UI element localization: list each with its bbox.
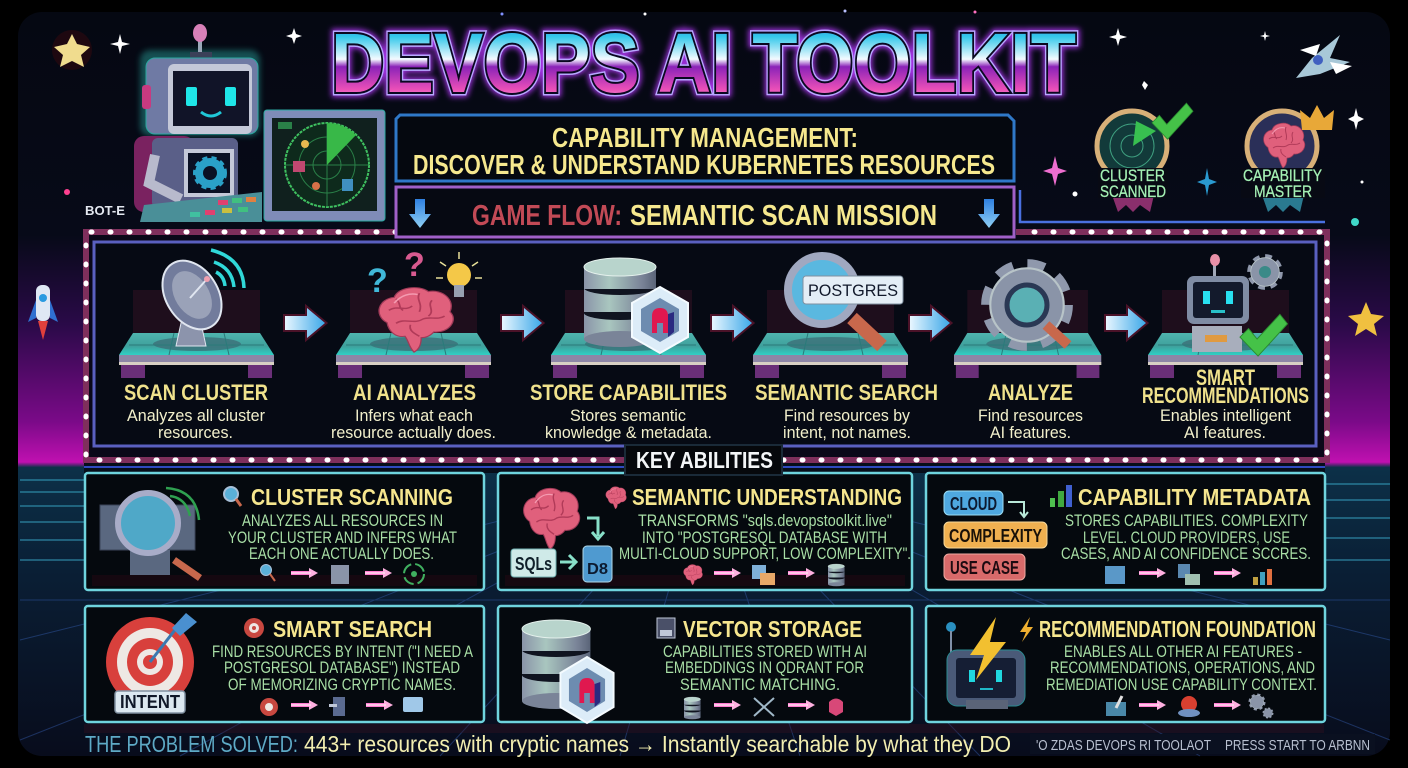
title: DEVOPS AI TOOLKIT [331, 16, 1076, 110]
arrow [910, 308, 950, 338]
icon: control console [140, 192, 262, 222]
card: cluster scanning: ANALYZES ALL RESOURCES IN [242, 511, 443, 530]
icon: gold star [1348, 302, 1384, 336]
badge: cluster scanned: CLUSTER [1100, 166, 1165, 185]
card: smart search [85, 606, 484, 722]
mini flow [1106, 695, 1273, 718]
icon: brain to database: D8 [587, 561, 608, 578]
panel: subtitle [396, 115, 1014, 181]
step 2: AI analyzes: ? [404, 246, 425, 284]
footer credits: PRESS START TO ARBNN [1225, 737, 1370, 754]
icon: down arrow left [409, 199, 431, 228]
icon: robot with lightning [946, 617, 1025, 709]
footer banner: 443+ resources with cryptic names → Instantly searchable by what they DO [304, 731, 1011, 757]
card: semantic understanding: MULTI-CLOUD SUPPORT, LOW COMPLEXITY". [619, 544, 911, 563]
card: recommendation foundation: REMEDIATION USE CAPABILITY CONTEXT. [1046, 675, 1317, 694]
step 6: smart recommendations [1142, 254, 1309, 442]
title: CLUSTER SCANNING [251, 484, 453, 510]
badge: capability master [1241, 105, 1334, 212]
badge: cluster scanned [1097, 103, 1193, 212]
panel: game flow heading: SEMANTIC SCAN MISSION [630, 200, 937, 232]
mini flow [260, 697, 423, 716]
step 1: scan cluster: Analyzes all cluster [127, 406, 265, 425]
title: CAPABILITY METADATA [1078, 484, 1311, 510]
card: semantic understanding [498, 473, 912, 590]
pills: CLOUD [950, 494, 997, 514]
step 3: store capabilities: Stores semantic [570, 406, 686, 425]
POSTGRES tag [803, 276, 903, 304]
panel: subtitle: DISCOVER & UNDERSTAND KUBERNETES RESOURCES [413, 149, 995, 180]
title: SEMANTIC UNDERSTANDING [632, 484, 902, 510]
step 3: store capabilities [530, 258, 727, 442]
icon: rocket [28, 285, 58, 340]
title: DEVOPS AI TOOLKIT [331, 16, 1076, 110]
mini flow [684, 697, 843, 719]
panel: subtitle: CAPABILITY MANAGEMENT: [552, 122, 858, 153]
title: DEVOPS AI TOOLKIT [331, 16, 1076, 110]
pills: COMPLEXITY [949, 526, 1042, 546]
badge: capability master: CAPABILITY [1243, 166, 1322, 185]
card: semantic understanding: INTO "POSTGRESQL DATABASE WITH [642, 528, 887, 547]
icon: brain to database [511, 488, 612, 582]
card: capability metadata [926, 473, 1325, 590]
card: recommendation foundation [926, 606, 1325, 722]
step 1: scan cluster [119, 250, 274, 442]
footer banner: THE PROBLEM SOLVED: [85, 731, 298, 757]
icon: down arrow right [978, 199, 1000, 228]
icon: magnifier over servers [100, 488, 200, 578]
footer credits [1030, 734, 1375, 754]
step 5: analyze [954, 267, 1101, 442]
step 5: analyze: AI features. [990, 423, 1071, 442]
panel: game flow heading: GAME FLOW: [472, 200, 622, 232]
panel: main game flow frame [84, 190, 1327, 467]
title: DEVOPS AI TOOLKIT [331, 16, 1076, 110]
mini flow [684, 564, 845, 586]
icon: radar monitor [264, 110, 385, 221]
step 2: AI analyzes [331, 246, 496, 442]
step 6: smart recommendations: Enables intelligent [1160, 406, 1291, 425]
title: VECTOR STORAGE [683, 616, 862, 642]
panel: game flow heading [396, 187, 1014, 237]
step 1: scan cluster: SCAN CLUSTER [124, 380, 268, 405]
arrow [1106, 308, 1146, 338]
step 6: smart recommendations: RECOMMENDATIONS [1142, 383, 1309, 408]
step 4: semantic search: Find resources by [784, 406, 910, 425]
mini flow [1105, 564, 1272, 585]
card: recommendation foundation: ENABLES ALL OTHER AI FEATURES - [1064, 642, 1302, 661]
badge: capability master: MASTER [1254, 182, 1312, 201]
arrow [285, 308, 325, 338]
step 4: semantic search: intent, not names. [783, 423, 911, 442]
label: BOT-E: BOT-E [85, 203, 125, 218]
card: cluster scanning: YOUR CLUSTER AND INFERS WHAT [228, 528, 457, 547]
card: capability metadata: STORES CAPABILITIES. COMPLEXITY [1065, 511, 1308, 530]
arrow [502, 308, 542, 338]
icon: database with hexagon [522, 620, 614, 723]
card: smart search: OF MEMORIZING CRYPTIC NAMES. [228, 675, 456, 694]
step 4: semantic search [753, 256, 938, 442]
icon: brain to database: SQLs [515, 554, 552, 574]
heading: key abilities: KEY ABILITIES [636, 447, 773, 473]
icon: target [106, 613, 197, 713]
icon: robot [134, 24, 260, 212]
step 2: AI analyzes: Infers what each [355, 406, 473, 425]
card: vector storage [498, 606, 912, 723]
title: SMART SEARCH [273, 616, 432, 642]
card: recommendation foundation: RECOMMENDATIONS, OPERATIONS, AND [1050, 658, 1315, 677]
card: smart search: FIND RESOURCES BY INTENT ("I NEED A [212, 642, 474, 661]
step 1: scan cluster: resources. [158, 423, 233, 442]
badges [1097, 103, 1334, 212]
card: vector storage: SEMANTIC MATCHING. [680, 675, 840, 694]
step 3: store capabilities: STORE CAPABILITIES [530, 380, 727, 405]
POSTGRES tag: POSTGRES [808, 281, 898, 300]
arrow [712, 308, 752, 338]
step 2: AI analyzes: AI ANALYZES [353, 380, 476, 405]
step 2: AI analyzes: resource actually does. [331, 423, 496, 442]
card: smart search: POSTGRESOL DATABASE") INSTEAD [224, 658, 460, 677]
card: cluster scanning: EACH ONE ACTUALLY DOES. [249, 544, 434, 563]
card: capability metadata: LEVEL. CLOUD PROVIDERS, USE [1083, 528, 1290, 547]
icon: target: INTENT [120, 692, 180, 712]
card: vector storage: EMBEDDINGS IN QDRANT FOR [665, 658, 864, 677]
stars and decorations [28, 10, 1384, 340]
step 5: analyze: ANALYZE [988, 380, 1073, 405]
footer credits: 'O ZDAS DEVOPS RI TOOLAOT [1036, 737, 1211, 754]
card: cluster scanning [85, 473, 484, 590]
card: capability metadata: CASES, AND AI CONFIDENCE SCCRES. [1061, 544, 1311, 563]
step 6: smart recommendations: SMART [1196, 365, 1255, 390]
step 2: AI analyzes: ? [367, 262, 388, 300]
icon: yellow star [52, 30, 92, 70]
card: semantic understanding: TRANSFORMS "sqls.devopstoolkit.live" [638, 511, 892, 530]
step 6: smart recommendations: AI features. [1184, 423, 1266, 442]
robot BOT-E at console [85, 24, 385, 222]
badge: cluster scanned: SCANNED [1100, 182, 1166, 201]
step 5: analyze: Find resources [978, 406, 1083, 425]
step 3: store capabilities: knowledge & metadata. [545, 423, 712, 442]
pills: USE CASE [950, 558, 1019, 578]
pills [944, 491, 1047, 580]
card: vector storage: CAPABILITIES STORED WITH AI [663, 642, 867, 661]
step 4: semantic search: SEMANTIC SEARCH [755, 380, 938, 405]
icon: spaceship [1296, 35, 1352, 78]
mini flow [260, 564, 424, 584]
